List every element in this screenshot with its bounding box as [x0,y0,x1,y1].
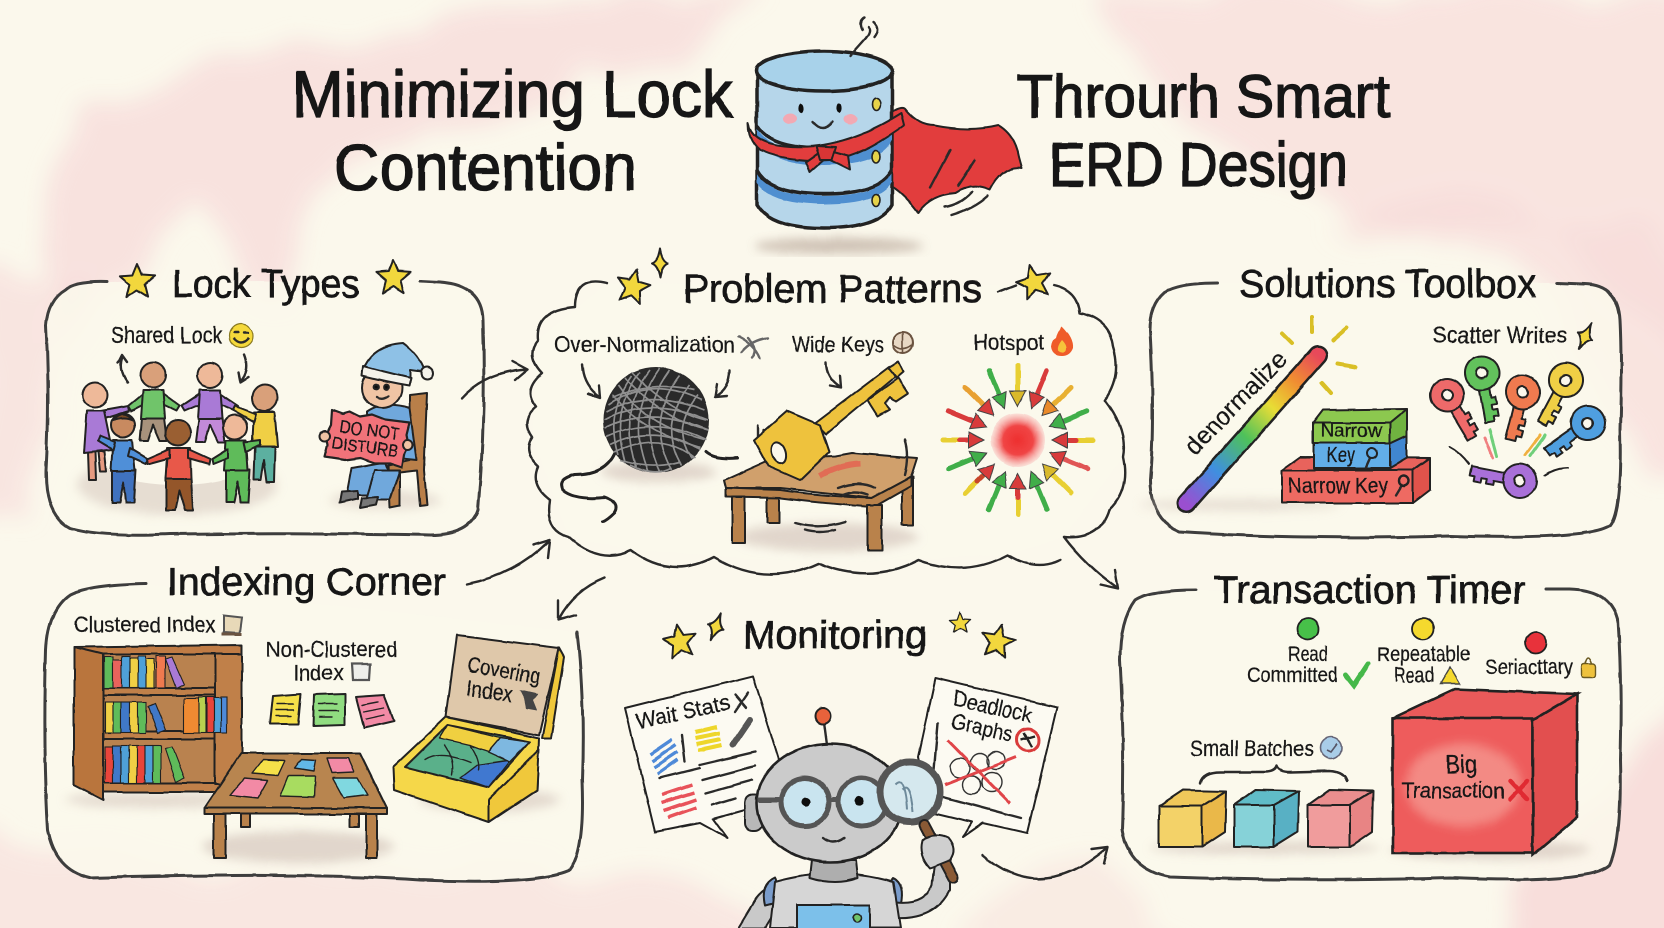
label: wide keys: Wide Keys [792,332,884,357]
label: non-clustered index: Index [293,660,344,685]
arrow: indexing corner to problem patterns [467,540,550,584]
title line: Contention: Contention [334,130,637,204]
icon: clock [1320,738,1342,758]
status: repeatable read: Read [1394,664,1434,687]
block labels: Key [1327,444,1355,467]
icon: smiley [229,324,253,348]
heading: lock types: Lock Types [172,263,360,306]
illustration: rainbow wand [1140,317,1355,511]
illustration: scattered colourful keys [1424,353,1612,501]
icon: stars [613,249,1054,305]
icon: sparkle [1571,319,1599,353]
label: non-clustered index: Non-Clustered [266,637,397,662]
card: deadlock graphs [918,678,1057,837]
panel: monitoring [625,611,1057,928]
heading: problem patterns: Problem Patterns [683,268,982,311]
illustration: table with notes [203,753,393,863]
label: big transaction [1402,751,1527,803]
illustration: sticky notes [270,694,394,728]
icon: book [222,616,242,634]
icon: no sign [1017,729,1039,751]
icon: tangle [738,336,768,358]
status: serializable [1485,632,1596,679]
arrows around circle [118,354,248,382]
panel: problem patterns [527,249,1125,574]
arrow: problem patterns to transaction timer [1064,537,1118,589]
panel: solutions toolbox [1140,263,1621,537]
label: scatter writes: Scatter Writes [1432,322,1567,348]
illustration: sleepy person with do not disturb sign [320,343,440,510]
label: deadlock graphs: Deadlock [951,686,1035,728]
label: denormalize: denormalize [1179,345,1292,461]
label: covering index: Covering [465,652,542,689]
heading: solutions toolbox: Solutions Toolbox [1239,263,1536,306]
illustration: tangled yarn ball [561,367,737,522]
panel: transaction timer [1120,569,1621,880]
status: repeatable read [1377,618,1470,687]
status: repeatable read: Repeatable [1377,643,1470,666]
status: read committed [1247,618,1368,687]
sign text: DO NOT [338,416,401,444]
title [292,57,1390,204]
label: over-normalization: Over-Normalization [554,332,735,357]
heading: transaction timer: Transaction Timer [1214,569,1525,612]
label: clustered index: Clustered Index [74,612,216,637]
arrow: lock types to problem patterns [462,361,528,398]
illustration: oversized key crushing a table [724,362,918,551]
block labels [1288,421,1409,498]
title line: ERD Design: ERD Design [1049,131,1348,200]
sign text: DISTURB [331,432,399,461]
block labels: Narrow Key [1288,473,1388,498]
icon: flame [1051,326,1073,356]
panel: indexing corner [45,561,583,881]
block labels: Narrow [1320,421,1382,442]
label: big transaction: Transaction [1402,778,1504,803]
illustration: hotspot burst with converging arrows [943,365,1093,515]
label: small batches: Small Batches [1190,736,1314,761]
mascot: database superhero [748,18,1022,254]
label: non-clustered index [266,637,397,685]
icon: note [352,664,370,680]
icon: star right [376,260,410,293]
label: wait stats: Wait Stats [634,690,732,734]
illustration: people holding hands in a circle [77,362,278,515]
label: covering index [464,652,542,710]
illustration: stacked narrow key blocks [1282,409,1430,503]
illustration: bookshelf [65,645,245,808]
heading: monitoring: Monitoring [743,614,927,657]
status: serializable: Seriacttary [1485,656,1573,679]
arrows to yarn and key [582,362,841,398]
label: hotspot: Hotspot [973,330,1044,355]
arrow: monitoring to transaction timer [983,847,1108,878]
illustration: puzzle box [393,635,564,822]
panel: lock types [46,260,484,535]
label: deadlock graphs: Graphs [949,709,1016,747]
icon: stars [660,611,1018,659]
card: wait stats [625,676,782,838]
label: big transaction: Big [1446,751,1477,779]
icon: key ring [893,333,913,353]
heading: indexing corner: Indexing Corner [167,561,446,604]
small cubes [1150,790,1380,854]
title line: Minimizing Lock: Minimizing Lock [292,57,734,131]
sign text [331,415,401,461]
status: read committed: Committed [1247,664,1338,687]
label: shared lock: Shared Lock [111,322,222,348]
label: deadlock graphs [949,686,1035,747]
big red cube [1390,689,1590,860]
brace [1200,766,1347,783]
status: read committed: Read [1288,643,1328,666]
illustration: robot with magnifying glass [738,708,954,928]
arrow: problem patterns to indexing corner [558,578,605,620]
label: covering index: Index [464,675,515,707]
title line: Throurh Smart: Throurh Smart [1017,63,1390,130]
icon: star left [120,264,154,297]
